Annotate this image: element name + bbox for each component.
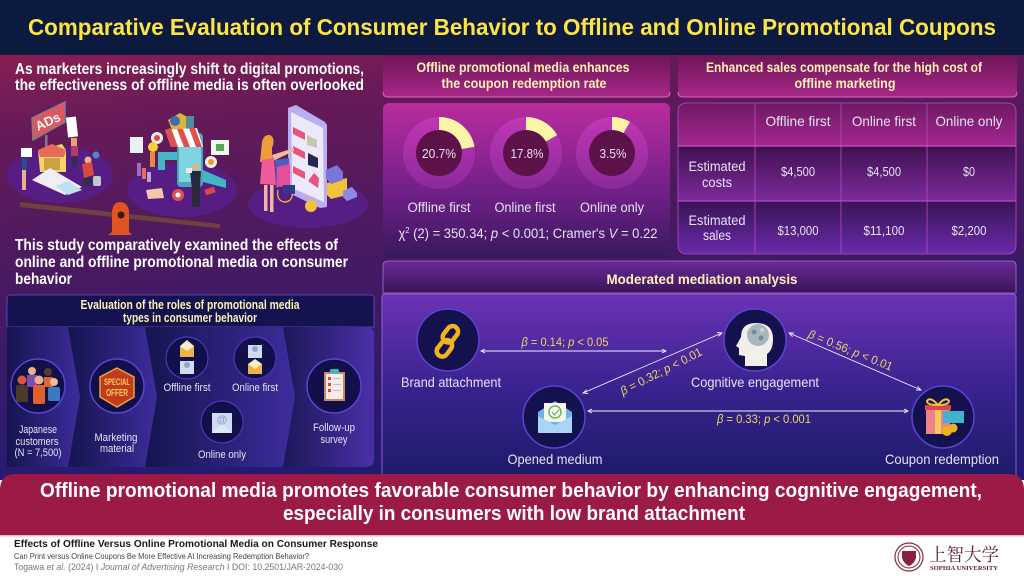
study aim text: This study comparatively examined the effects of: [15, 237, 339, 254]
panel: coupon redemption donuts: [383, 103, 670, 258]
logo: Sophia University: 上智大学: [929, 541, 999, 567]
label: Japanese customers: (N = 7,500): [14, 447, 62, 459]
table: costs and sales: $4,500: [867, 165, 901, 179]
arrow: opened to coupon: [588, 409, 908, 413]
logo: Sophia University: [895, 541, 999, 572]
label: brand attachment: Brand attachment: [401, 374, 501, 390]
arrow: opened to cognitive: [583, 332, 722, 394]
citation: Can Print versus Online Coupons Be More Effective At Increasing Redemption Behavior?: [14, 551, 309, 561]
donut: online only: 3.5%: [600, 146, 627, 161]
label: offline first: Offline first: [408, 200, 471, 215]
donut: online first: [490, 117, 562, 189]
coefficient: opened to cognitive: β = 0.32; p < 0.01: [617, 345, 705, 399]
donut: offline first: 20.7%: [422, 146, 456, 161]
label: opened medium: Opened medium: [508, 451, 602, 467]
label: online first: Online first: [494, 200, 556, 215]
title banner: [0, 0, 1024, 55]
heading: redemption rate: [383, 55, 670, 97]
label: marketing material: Marketing: [94, 432, 138, 444]
table: costs and sales: Online first: [852, 113, 916, 129]
intro text: the effectiveness of offline media is often overlooked: [15, 77, 364, 94]
arrow: brand to cognitive: [481, 349, 666, 353]
coefficient: cognitive to coupon: β = 0.56; p < 0.01: [805, 327, 895, 374]
study aim text: behavior: [15, 271, 72, 288]
node: brand attachment: [417, 309, 479, 371]
table: costs and sales: costs: [702, 175, 732, 190]
table: costs and sales: Estimated: [688, 213, 746, 228]
node: opened medium: [523, 386, 585, 448]
heading: moderated mediation analysis: Moderated mediation analysis: [606, 271, 798, 287]
label: cognitive engagement: Cognitive engagement: [691, 374, 819, 390]
seesaw: [20, 202, 220, 235]
citation: Togawa et al. (2024) I Journal of Advertising Research I DOI: 10.2501/JAR-2024-030: [14, 562, 343, 572]
table: costs and sales: $2,200: [952, 224, 987, 238]
label: offline first: Offline first: [164, 382, 210, 394]
conclusion banner: Offline promotional media promotes favorable consumer behavior by enhancing cognitive engagement,: [40, 480, 982, 502]
table: costs and sales: Estimated: [688, 159, 746, 174]
heading: evaluation: Evaluation of the roles of promotional media: [80, 298, 300, 312]
citation: Effects of Offline Versus Online Promotional Media on Consumer Response: [14, 538, 378, 550]
table: costs and sales: [678, 103, 1016, 254]
arrow: cognitive to coupon: [789, 333, 921, 390]
label: marketing material: material: [100, 443, 134, 455]
intro text: As marketers increasingly shift to digital promotions,: [15, 61, 364, 78]
illustration: online shopping phone: [248, 105, 368, 228]
icon: offline first: [166, 337, 208, 379]
title banner: Comparative Evaluation of Consumer Behavior to Offline and Online Promotional Coupons: [28, 14, 996, 40]
heading: enhanced sales: Enhanced sales compensate for the high cost of: [706, 60, 982, 75]
coefficient: opened to coupon: β = 0.33; p < 0.001: [716, 412, 811, 426]
icon: online first: [234, 337, 276, 379]
panel: mediation diagram: [382, 294, 1016, 478]
conclusion banner: especially in consumers with low brand attachment: [283, 503, 745, 525]
donut: online first: 17.8%: [510, 146, 544, 161]
flow chevrons: [7, 327, 374, 467]
label: Japanese customers: customers: [16, 436, 59, 448]
step: marketing material: [90, 359, 144, 413]
heading: moderated mediation analysis: [383, 261, 1016, 293]
footer background: [0, 535, 1024, 576]
label: follow-up survey: Follow-up: [313, 422, 355, 434]
heading: redemption rate: the coupon redemption rate: [442, 76, 607, 91]
node: coupon redemption: [912, 386, 974, 448]
label: online only: Online only: [198, 449, 246, 461]
table: costs and sales: $0: [963, 165, 975, 179]
label: online first: Online first: [232, 382, 278, 394]
label: Japanese customers: Japanese: [19, 424, 57, 436]
panel: study design: [7, 295, 374, 467]
heading: redemption rate: Offline promotional media enhances: [416, 60, 630, 75]
statistics: χ: [398, 225, 406, 241]
donut: offline first: [403, 117, 475, 189]
citation: [14, 538, 378, 572]
table: costs and sales: $13,000: [778, 224, 819, 238]
table: costs and sales: sales: [703, 228, 731, 243]
heading: enhanced sales: [678, 55, 1017, 97]
illustration: offline advertising: ADs: [33, 109, 63, 134]
statistics: 2: [405, 226, 410, 235]
heading: evaluation: types in consumer behavior: [123, 311, 257, 325]
label: online only: Online only: [580, 200, 644, 215]
table: costs and sales: $4,500: [781, 165, 815, 179]
heading: evaluation: [7, 295, 374, 327]
page background: [0, 50, 1024, 480]
statistics: (2) = 350.34;: [409, 225, 491, 241]
table: costs and sales: Online only: [936, 113, 1002, 129]
donut: online only: [576, 117, 648, 189]
illustration: digital marketing phone: [127, 113, 237, 217]
illustration: offline advertising: [7, 102, 113, 203]
step: marketing material: OFFER: [106, 387, 128, 399]
logo: Sophia University: SOPHIA UNIVERSITY: [930, 565, 998, 572]
conclusion banner: [0, 474, 1024, 536]
step: marketing material: SPECIAL: [104, 377, 130, 388]
statistics: p < 0.001; Cramer's V = 0.22: [491, 225, 661, 241]
node: cognitive engagement: [724, 309, 786, 371]
heading: enhanced sales: offline marketing: [794, 76, 896, 91]
icon: online only: @: [217, 414, 228, 426]
step: follow-up survey: [307, 359, 361, 413]
label: follow-up survey: survey: [320, 434, 348, 446]
icon: online only: [201, 401, 243, 443]
table: costs and sales: Offline first: [766, 113, 831, 129]
label: coupon redemption: Coupon redemption: [885, 451, 999, 467]
study aim text: online and offline promotional media on consumer: [15, 254, 348, 271]
table: costs and sales: $11,100: [864, 224, 905, 238]
coefficient: brand to cognitive: β = 0.14; p < 0.05: [521, 335, 609, 349]
step: Japanese customers: [11, 359, 65, 413]
